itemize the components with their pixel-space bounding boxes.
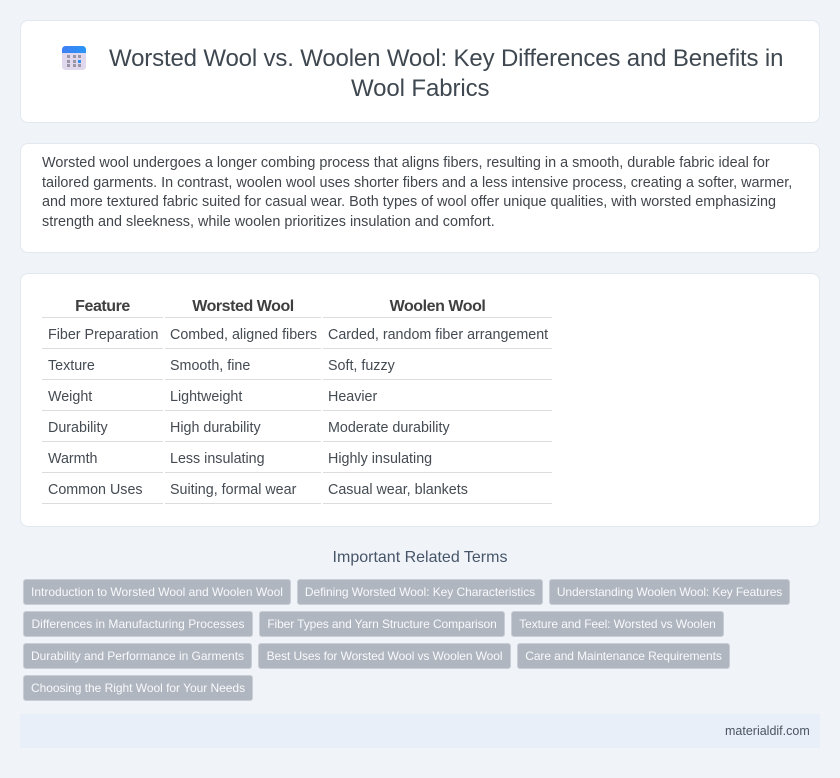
comparison table: Smooth, fine [170, 358, 250, 374]
comparison table: Heavier [328, 389, 377, 405]
comparison table: Fiber Preparation [48, 327, 158, 343]
comparison table: Durability [48, 420, 108, 436]
comparison table: High durability [170, 420, 261, 436]
comparison table: Suiting, formal wear [170, 482, 296, 498]
related term tags: Defining Worsted Wool: Key Characteristics [305, 585, 535, 599]
related term tags [23, 579, 790, 701]
icon: calendar grid [62, 46, 86, 70]
comparison table: Moderate durability [328, 420, 450, 436]
title [109, 45, 783, 102]
title: Wool Fabrics [351, 75, 489, 102]
comparison table: Carded, random fiber arrangement [328, 327, 548, 343]
text block: introduction: tailored garments. In contrast, woolen wool uses shorter fibers and a less intensive process, creating a softer, warmer, [42, 175, 792, 191]
panel: introduction [20, 143, 820, 253]
related term tags: Durability and Performance in Garments [31, 649, 244, 663]
text block: introduction [42, 155, 792, 230]
footer bar [20, 714, 820, 748]
related term tags: Best Uses for Worsted Wool vs Woolen Wool [267, 649, 502, 663]
text block: introduction: strength and sleekness, while woolen prioritizes insulation and comfort. [42, 214, 495, 230]
panel: header [20, 20, 820, 123]
comparison table: Lightweight [170, 389, 242, 405]
comparison table: Combed, aligned fibers [170, 327, 317, 343]
comparison table: Weight [48, 389, 92, 405]
title: Worsted Wool vs. Woolen Wool: Key Differences and Benefits in [109, 45, 783, 72]
comparison table: Highly insulating [328, 451, 432, 467]
related term tags: Introduction to Worsted Wool and Woolen Wool [31, 585, 283, 599]
comparison table: Casual wear, blankets [328, 482, 468, 498]
comparison table: Warmth [48, 451, 98, 467]
comparison table [42, 298, 552, 504]
comparison table: Less insulating [170, 451, 265, 467]
related term tags: Differences in Manufacturing Processes [31, 617, 245, 631]
footer source text: materialdif.com [725, 724, 810, 738]
related term tags: Fiber Types and Yarn Structure Comparison [267, 617, 497, 631]
related term tags: Care and Maintenance Requirements [525, 649, 722, 663]
related term tags: Choosing the Right Wool for Your Needs [31, 681, 245, 695]
panel: comparison table [20, 273, 820, 527]
comparison table: Soft, fuzzy [328, 358, 395, 374]
comparison table: Texture [48, 358, 95, 374]
comparison table: Common Uses [48, 482, 143, 498]
heading: important related terms: Important Related Terms [333, 549, 507, 566]
related term tags: Understanding Woolen Wool: Key Features [557, 585, 782, 599]
text block: introduction: and more textured fabric suited for casual wear. Both types of wool offer unique qualities, with worsted emphasizing [42, 194, 776, 210]
comparison table: Worsted Wool [192, 298, 294, 315]
comparison table: Feature [75, 298, 130, 315]
text block: introduction: Worsted wool undergoes a longer combing process that aligns fibers, resulting in a smooth, durable fabric ideal for [42, 155, 770, 171]
comparison table: Woolen Wool [390, 298, 485, 315]
related term tags: Texture and Feel: Worsted vs Woolen [519, 617, 716, 631]
